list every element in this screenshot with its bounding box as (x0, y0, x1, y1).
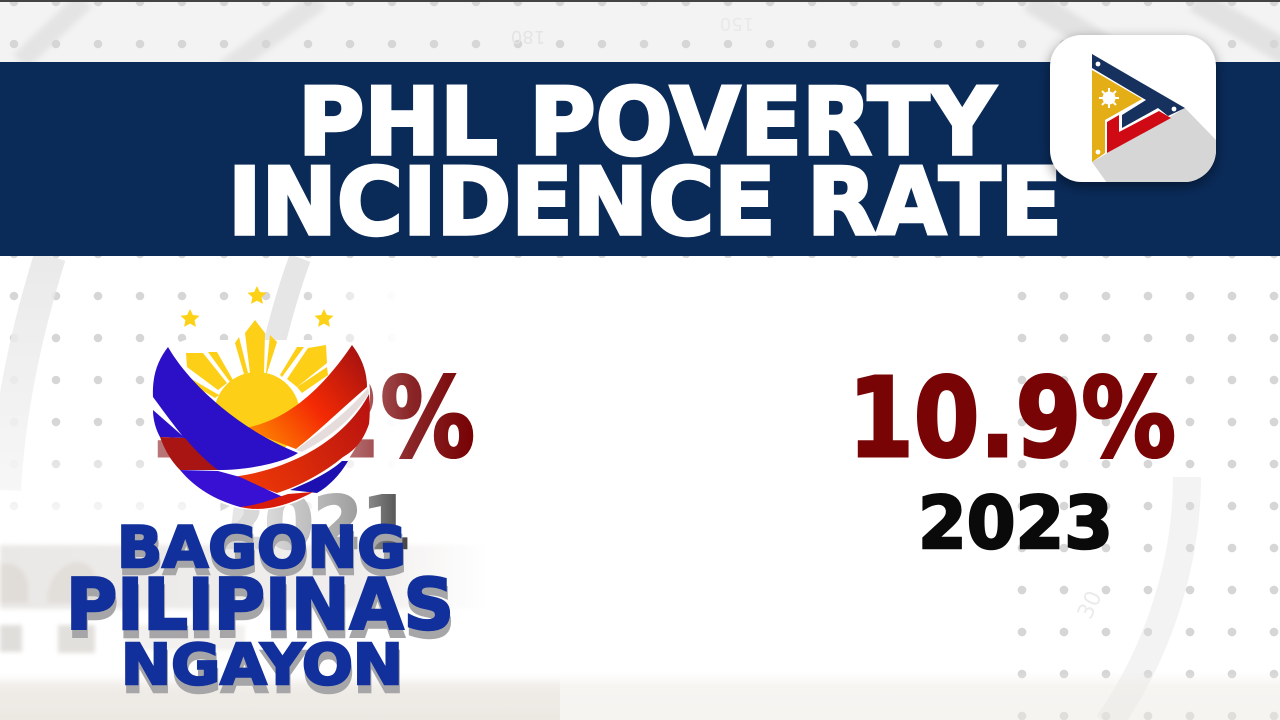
blurred building backdrop (0, 545, 490, 653)
emblem lower blue band (180, 470, 283, 507)
wordmark shadow (67, 522, 455, 706)
2023 year: 2023 (918, 481, 1113, 565)
logo sun (1099, 88, 1119, 108)
clear central area (400, 258, 1000, 720)
2023 rate: 10.9% (848, 354, 1176, 482)
emblem dark red left band (160, 437, 218, 470)
wordmark: Pilipinas: PILIPINAS (66, 564, 454, 646)
emblem left blue sliver (153, 410, 185, 438)
faint scale numbers: 180 (511, 26, 545, 47)
wordmark shadow: NGAYON (122, 641, 404, 706)
Bagong Pilipinas emblem (153, 286, 370, 510)
top strip behind banner (0, 0, 1280, 62)
wordmark shadow: PILIPINAS (67, 572, 455, 654)
2023 value (848, 354, 1176, 565)
emblem sun (186, 320, 328, 458)
app logo badge (1050, 35, 1216, 190)
logo red band (1107, 111, 1171, 153)
wordmark shadow: BAGONG (118, 522, 407, 588)
logo stars (1096, 62, 1176, 154)
faint scale numbers: 150 (720, 13, 754, 34)
emblem middle red band (232, 394, 370, 493)
faint gauge arcs (5, 256, 50, 490)
emblem lower blue right band (290, 461, 348, 493)
faint scale numbers: 30 (1073, 587, 1108, 623)
logo navy band (1092, 54, 1185, 128)
emblem stars (181, 286, 334, 327)
Bagong Pilipinas Ngayon wordmark (66, 515, 455, 706)
title banner (0, 62, 1280, 256)
2021 value, partly covered by logo (148, 354, 475, 565)
emblem red upper band (245, 345, 367, 449)
emblem white backing (153, 340, 370, 510)
title: line 2: INCIDENCE RATE (228, 148, 1062, 256)
title: line 1: PHL POVERTY (298, 68, 997, 176)
2021 rate: 13.2% (148, 354, 475, 482)
2021 year: 2021 (216, 481, 411, 565)
wordmark: Bagong: BAGONG (117, 515, 406, 581)
emblem white stripe (296, 388, 369, 452)
floor (0, 672, 1280, 720)
wordmark: Ngayon: NGAYON (121, 633, 403, 698)
logo gold triangle (1092, 70, 1142, 162)
emblem bottom red sliver (240, 492, 313, 509)
emblem blue upper band (153, 347, 298, 470)
logo long shadow (1092, 108, 1216, 190)
faint scale numbers (511, 13, 1108, 623)
